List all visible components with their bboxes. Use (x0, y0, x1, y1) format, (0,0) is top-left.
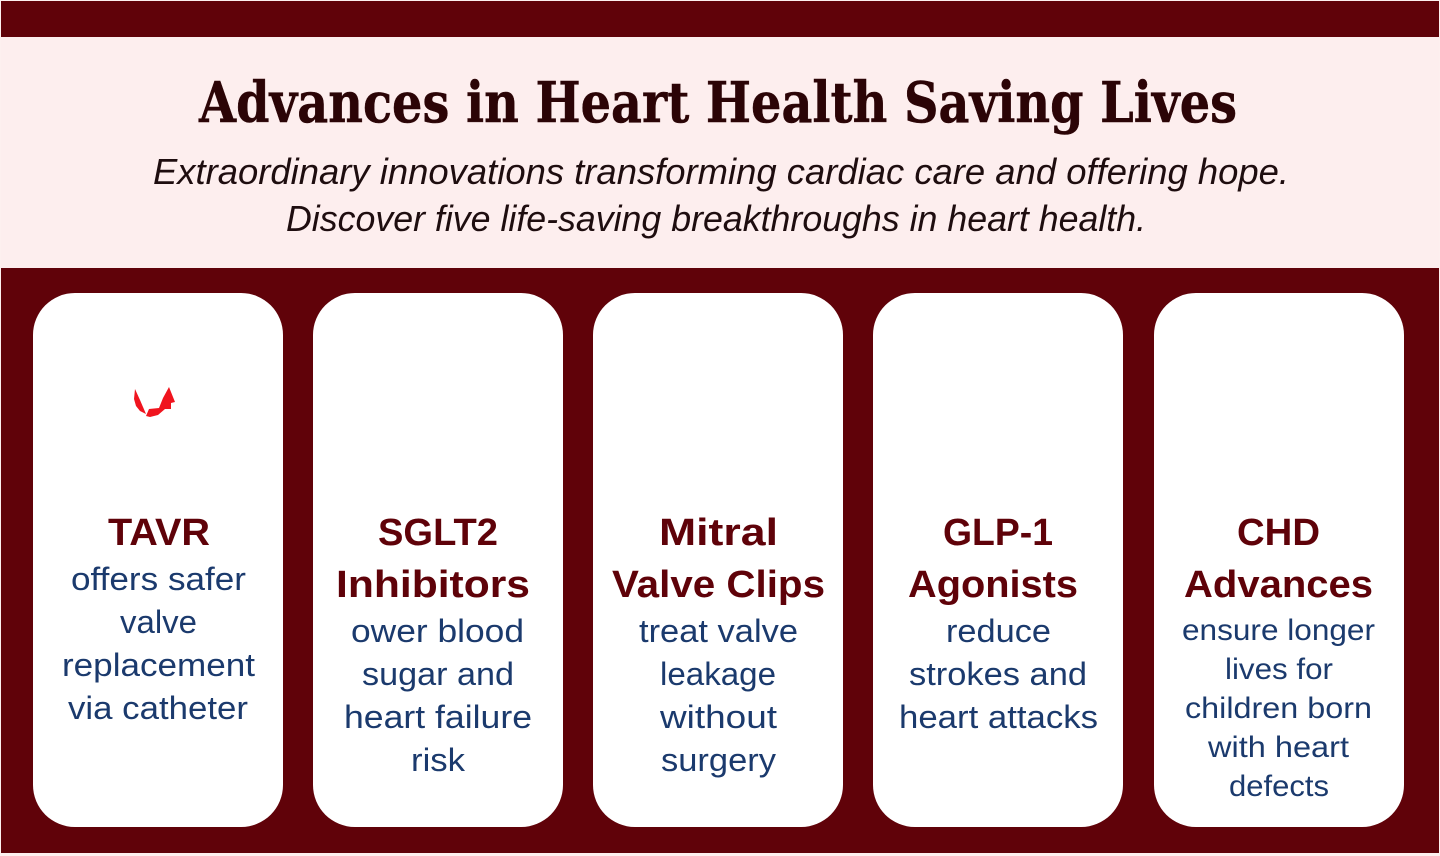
text: Mitral description: surgery (661, 742, 776, 778)
text: GLP-1 description: heart attacks (899, 699, 1098, 735)
header panel (1, 37, 1439, 268)
text: Mitral description (639, 613, 798, 778)
text: TAVR description: replacement (62, 647, 255, 683)
icon: partial red heart (134, 387, 175, 417)
heading: GLP-1 Agonists: GLP-1 (943, 512, 1053, 554)
text: CHD description (1182, 614, 1375, 803)
heading: TAVR: TAVR (108, 512, 210, 554)
heading: SGLT2 Inhibitors: Inhibitors (336, 564, 530, 606)
panel: CHD Advances (1154, 293, 1404, 827)
text: CHD description: children born (1185, 692, 1372, 725)
text: SGLT2 description: risk (411, 742, 466, 778)
panel: Mitral Valve Clips (593, 293, 843, 827)
panel: TAVR (33, 293, 283, 827)
subtitle: Extraordinary innovations transforming cardiac care and offering hope. (153, 151, 1289, 192)
heading: Mitral Valve Clips: Valve Clips (612, 564, 825, 606)
cards background (1, 268, 1439, 853)
text: SGLT2 description: sugar and (362, 656, 514, 692)
text: SGLT2 description: ower blood (351, 613, 524, 649)
text: Mitral description: without (659, 699, 777, 735)
panel: SGLT2 Inhibitors (313, 293, 563, 827)
heading: CHD Advances: CHD (1237, 512, 1320, 554)
subtitle (153, 151, 1289, 239)
text: CHD description: defects (1229, 770, 1329, 803)
text: Mitral description: leakage (660, 656, 776, 692)
panel: GLP-1 Agonists (873, 293, 1123, 827)
text: CHD description: lives for (1225, 653, 1333, 686)
text: GLP-1 description: reduce (946, 613, 1051, 649)
heading: GLP-1 Agonists (908, 512, 1078, 606)
text: SGLT2 description (344, 613, 532, 778)
top band (1, 1, 1439, 37)
text: CHD description: ensure longer (1182, 614, 1375, 647)
heading: Mitral Valve Clips: Mitral (659, 512, 778, 554)
text: TAVR description: valve (120, 604, 197, 640)
text: TAVR description (62, 561, 255, 726)
heading: CHD Advances: Advances (1184, 564, 1373, 606)
text: Mitral description: treat valve (639, 613, 798, 649)
text: TAVR description: via catheter (68, 690, 248, 726)
text: SGLT2 description: heart failure (344, 699, 532, 735)
text: GLP-1 description (899, 613, 1098, 735)
heading: Mitral Valve Clips (612, 512, 825, 606)
text: CHD description: with heart (1207, 731, 1350, 764)
heading: CHD Advances (1184, 512, 1373, 606)
text: TAVR description: offers safer (71, 561, 246, 597)
heading: SGLT2 Inhibitors: SGLT2 (378, 512, 498, 554)
subtitle: Discover five life-saving breakthroughs in heart health. (286, 198, 1146, 239)
heading: GLP-1 Agonists: Agonists (908, 564, 1078, 606)
title: Advances in Heart Health Saving Lives (198, 70, 1237, 136)
text: GLP-1 description: strokes and (909, 656, 1087, 692)
heading: SGLT2 Inhibitors (336, 512, 530, 606)
